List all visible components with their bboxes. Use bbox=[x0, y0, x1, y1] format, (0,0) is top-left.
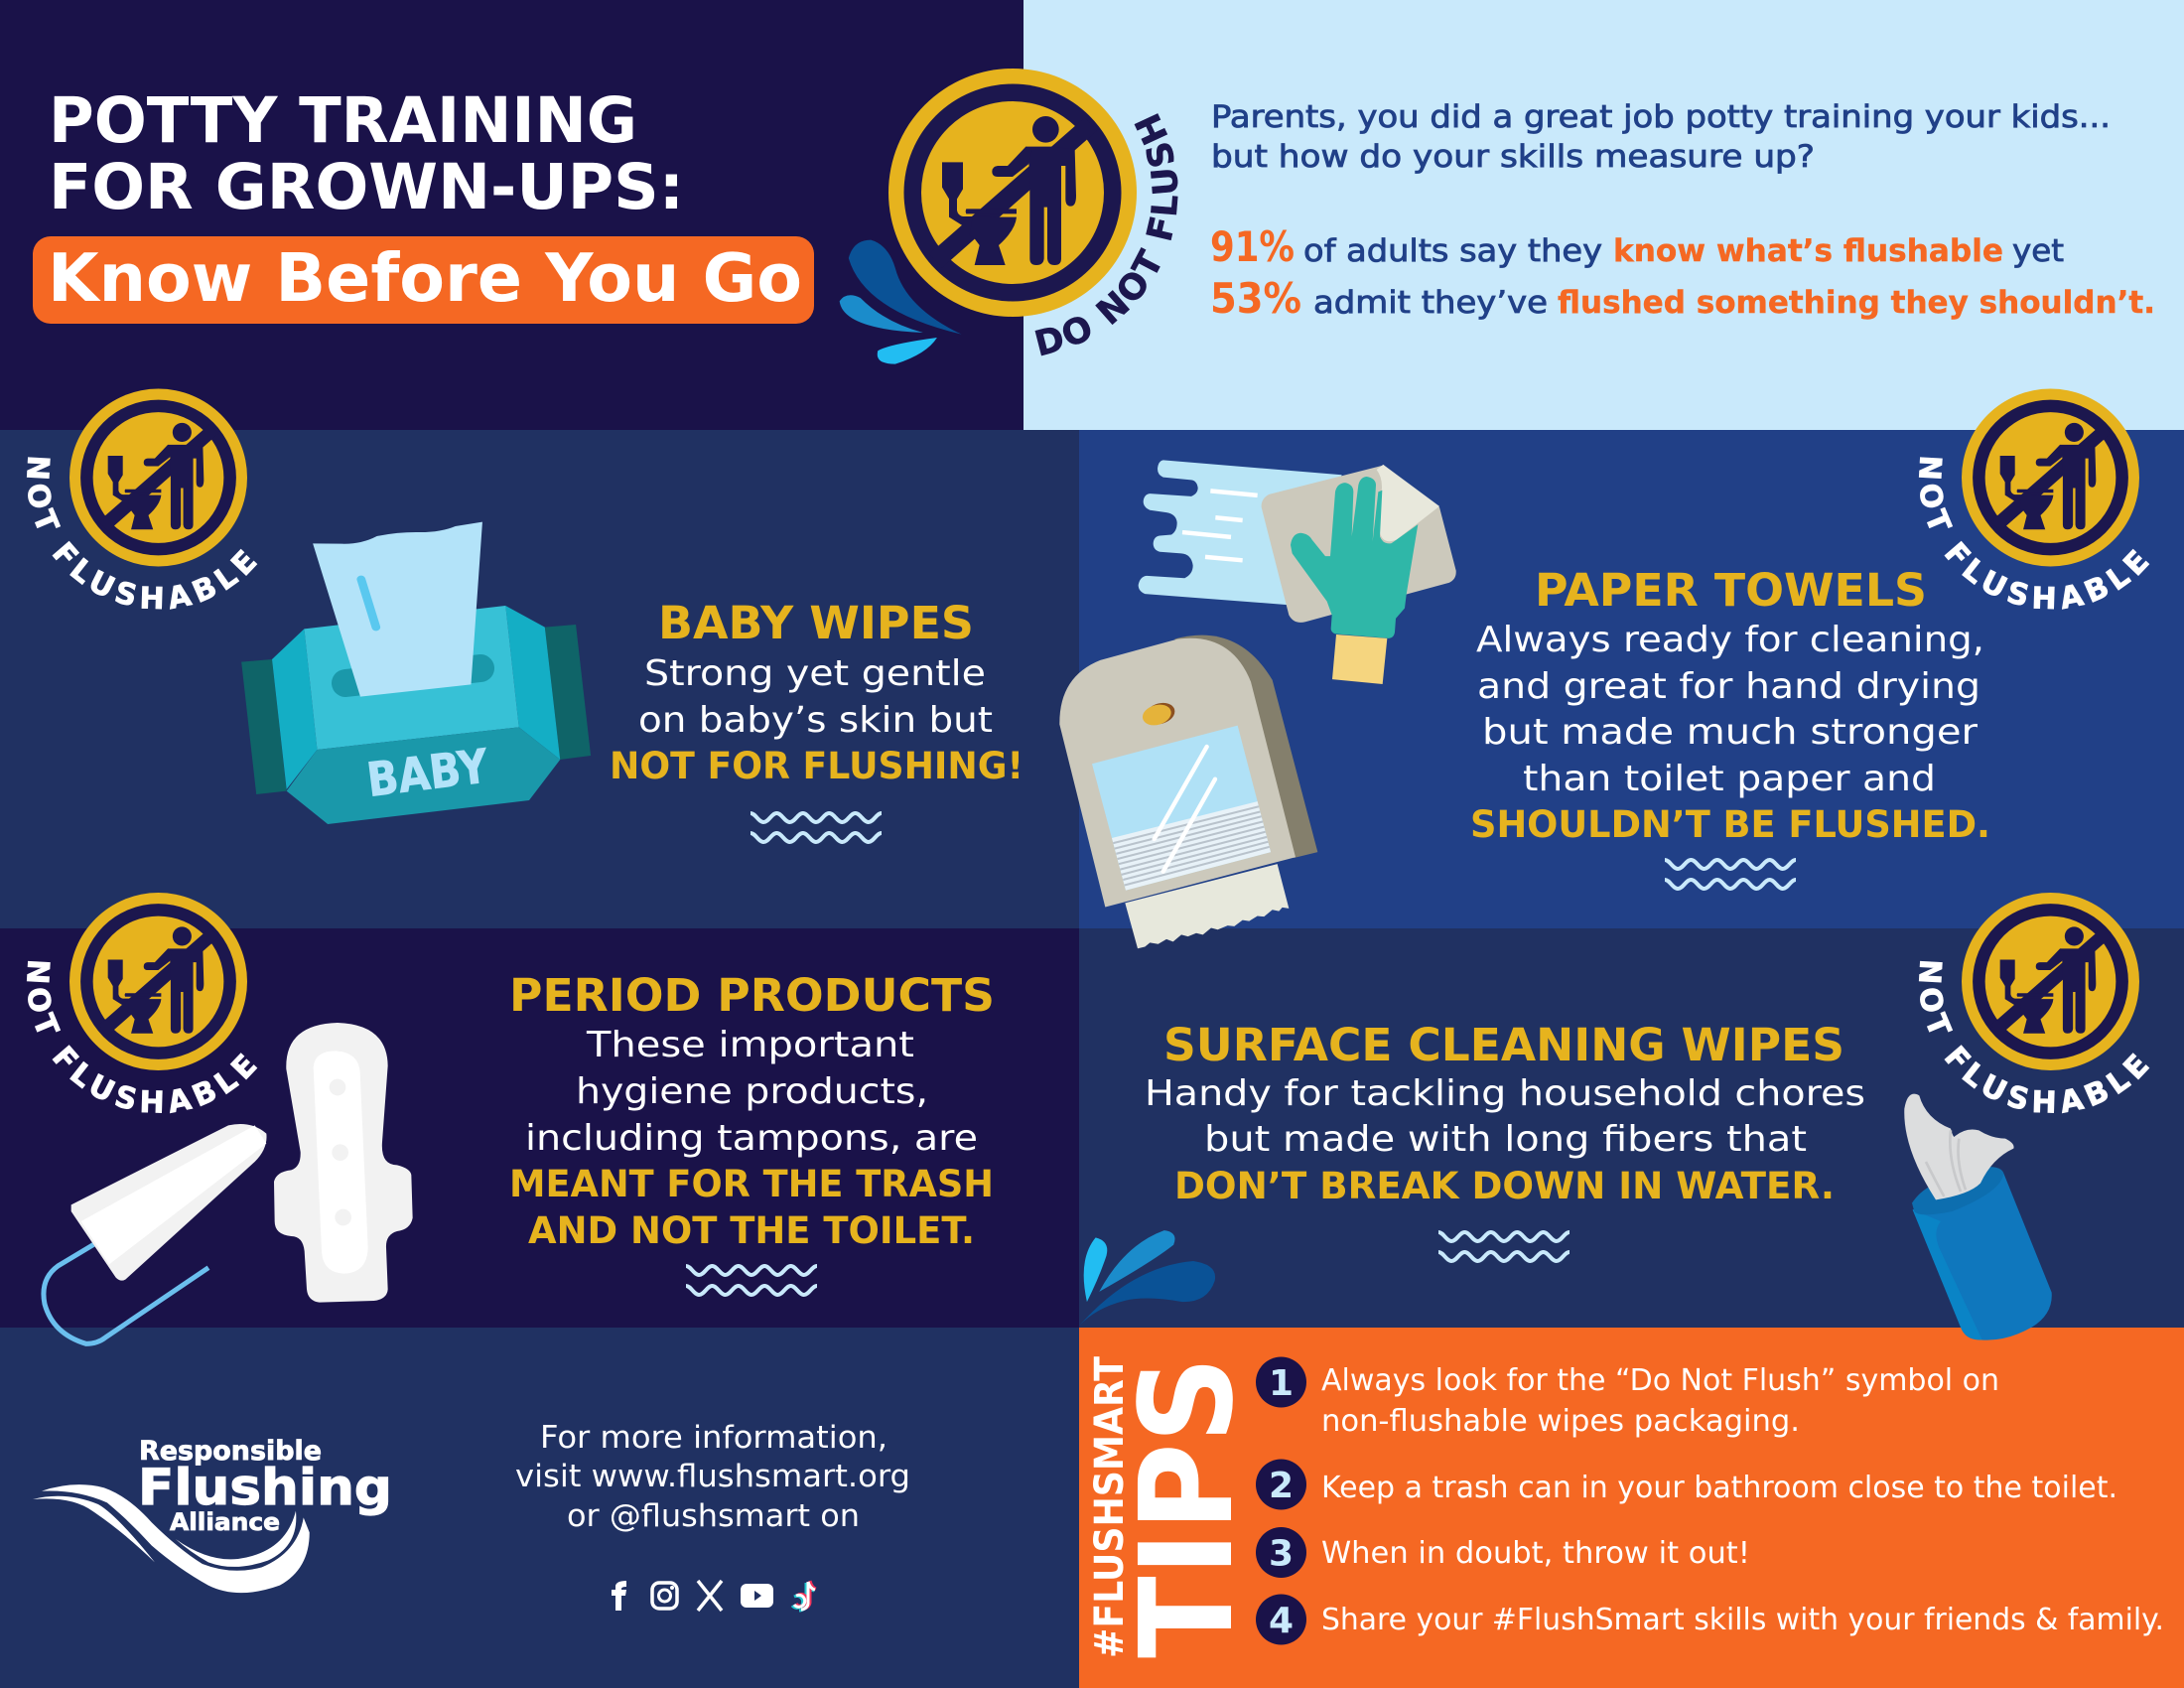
logo: Responsible Flushing Alliance: Flushing bbox=[138, 1459, 392, 1516]
text block: baby wipes description: Strong yet gentle bbox=[644, 653, 986, 694]
heading: baby wipes: BABY WIPES bbox=[658, 597, 974, 649]
intro question: Parents, you did a great job potty training your kids... bbox=[1211, 99, 2111, 135]
text block: more information bbox=[515, 1420, 910, 1534]
tip 3: 3 bbox=[1269, 1533, 1294, 1575]
icon: not flushable badge bbox=[1918, 389, 2150, 610]
statistic: 91 percent bbox=[1210, 222, 2064, 271]
text block: period products description: AND NOT THE TOILET. bbox=[528, 1209, 975, 1252]
text block: paper towels description: and great for hand drying bbox=[1477, 666, 1980, 707]
heading: surface cleaning wipes: SURFACE CLEANING WIPES bbox=[1163, 1019, 1844, 1071]
icon: squiggle bbox=[686, 1266, 817, 1295]
panel: header title bbox=[33, 84, 814, 324]
text block: period products description: MEANT FOR THE TRASH bbox=[509, 1163, 994, 1205]
tip 1: non-flushable wipes packaging. bbox=[1321, 1404, 1800, 1439]
text block: surface wipes description: but made with long fibers that bbox=[1204, 1119, 1807, 1160]
intro question bbox=[1211, 99, 2111, 175]
tip 1 bbox=[1256, 1356, 1999, 1439]
text block: period products description: These important bbox=[586, 1025, 914, 1065]
text block: paper towels description: but made much stronger bbox=[1482, 712, 1978, 753]
tip 4: Share your #FlushSmart skills with your friends & family. bbox=[1321, 1603, 2164, 1637]
text block: paper towels description bbox=[1470, 620, 1990, 846]
text block: period products description: including tampons, are bbox=[525, 1118, 978, 1159]
panel background: header left bbox=[0, 0, 1024, 430]
heading: period products: PERIOD PRODUCTS bbox=[509, 969, 995, 1022]
statistic: 53 percent: admit they’ve bbox=[1313, 285, 1548, 321]
tip 3 bbox=[1256, 1527, 1750, 1578]
tip 2: Keep a trash can in your bathroom close to the toilet. bbox=[1321, 1471, 2117, 1505]
text block: more information: For more information, bbox=[540, 1420, 887, 1456]
icon: squiggle bbox=[1438, 1232, 1570, 1261]
illustration: baby wipes box: BABY bbox=[364, 739, 491, 808]
logo: Responsible Flushing Alliance bbox=[33, 1436, 392, 1593]
tip 1: Always look for the “Do Not Flush” symbol on bbox=[1321, 1363, 1999, 1398]
text block: header statistics bbox=[1210, 99, 2155, 323]
title: FOR GROWN-UPS: bbox=[49, 151, 684, 223]
illustration: sanitary pad bbox=[274, 1023, 413, 1303]
text block: paper towels description: Always ready for cleaning, bbox=[1476, 620, 1984, 660]
logo: Responsible Flushing Alliance: Alliance bbox=[170, 1508, 280, 1536]
panel background: header right bbox=[1024, 0, 2184, 430]
panel: period products bbox=[26, 893, 995, 1346]
title: POTTY TRAINING bbox=[49, 84, 637, 157]
icon: not flushable badge: NOT FLUSHABLE bbox=[1918, 457, 2150, 610]
tip 1: 1 bbox=[1269, 1363, 1294, 1404]
icon: squiggle bbox=[1665, 860, 1796, 889]
icon: not flushable badge: NOT FLUSHABLE bbox=[1918, 961, 2150, 1114]
icon: not flushable badge bbox=[1918, 893, 2150, 1114]
text block: more information: or @flushsmart on bbox=[567, 1498, 860, 1534]
text block: paper towels description: SHOULDN’T BE FLUSHED. bbox=[1470, 803, 1990, 846]
text block: paper towels description: than toilet paper and bbox=[1523, 759, 1936, 799]
panel background: contact footer bbox=[0, 1328, 1079, 1688]
icon: do not flush badge: DO NOT FLUSH bbox=[1034, 113, 1178, 355]
illustration: wipes canister bbox=[1904, 1094, 2052, 1340]
text block: surface wipes description: DON’T BREAK DOWN IN WATER. bbox=[1174, 1165, 1835, 1207]
panel: baby wipes bbox=[26, 389, 1024, 844]
heading: paper towels: PAPER TOWELS bbox=[1535, 564, 1927, 617]
panel: contact footer bbox=[33, 1420, 910, 1611]
text block: baby wipes description: on baby’s skin but bbox=[638, 700, 993, 741]
icon: not flushable badge: NOT FLUSHABLE bbox=[26, 961, 258, 1114]
icon: water splash top bbox=[840, 240, 961, 364]
icon: squiggle bbox=[751, 813, 882, 842]
statistic: 53 percent: 53% bbox=[1210, 274, 1301, 323]
statistic: 91 percent: 91% bbox=[1210, 222, 1295, 271]
statistic: 91 percent: yet bbox=[2012, 233, 2064, 269]
title bbox=[49, 84, 684, 223]
illustration: tampon bbox=[44, 1124, 267, 1343]
text block: surface wipes description: Handy for tackling household chores bbox=[1145, 1073, 1865, 1114]
text block: baby wipes description bbox=[610, 653, 1024, 787]
illustration: hand wiping with paper towel bbox=[1139, 460, 1456, 684]
icon: not flushable badge bbox=[26, 389, 258, 610]
statistic: 91 percent: know what’s flushable bbox=[1613, 233, 2003, 269]
text block: baby wipes description: NOT FOR FLUSHING! bbox=[610, 745, 1024, 787]
heading: #FlushSmart tips: #FLUSHSMART bbox=[1087, 1355, 1133, 1658]
illustration: paper towel dispenser bbox=[1059, 635, 1317, 948]
panel background: tips bbox=[1079, 1328, 2184, 1688]
icon: water splash bbox=[1079, 1230, 1215, 1326]
panel: paper towels bbox=[1059, 389, 2150, 949]
panel background: period products bbox=[0, 928, 1079, 1328]
statistic: 53 percent bbox=[1210, 274, 2155, 323]
tip 4: 4 bbox=[1269, 1601, 1294, 1641]
statistic: 53 percent: flushed something they shouldn’t. bbox=[1558, 285, 2155, 321]
icon: not flushable badge: NOT FLUSHABLE bbox=[26, 457, 258, 610]
text block: period products description: hygiene products, bbox=[576, 1071, 928, 1112]
text block: surface wipes description bbox=[1145, 1073, 1865, 1207]
text block: more information: visit www.flushsmart.org bbox=[515, 1459, 910, 1494]
subtitle pill: Know Before You Go bbox=[48, 239, 802, 317]
icon: not flushable badge bbox=[26, 893, 258, 1114]
panel background: paper towels bbox=[1079, 430, 2184, 928]
panel: tips bbox=[1087, 1355, 2164, 1658]
panel: surface cleaning wipes bbox=[1080, 893, 2150, 1340]
intro question: but how do your skills measure up? bbox=[1211, 139, 1815, 175]
tip 2: 2 bbox=[1269, 1466, 1294, 1506]
text block: period products description bbox=[509, 1025, 994, 1252]
illustration: baby wipes box bbox=[241, 522, 591, 824]
icons: social media bbox=[612, 1581, 816, 1611]
tip 4 bbox=[1256, 1595, 2164, 1644]
logo: Responsible Flushing Alliance: Responsible bbox=[139, 1436, 322, 1467]
panel background: baby wipes bbox=[0, 430, 1079, 928]
tip 3: When in doubt, throw it out! bbox=[1321, 1536, 1750, 1571]
statistic: 91 percent: of adults say they bbox=[1303, 233, 1602, 269]
panel background: surface cleaning wipes bbox=[1079, 928, 2184, 1328]
tip 2 bbox=[1256, 1460, 2117, 1509]
heading: #FlushSmart tips: TIPS bbox=[1113, 1356, 1262, 1658]
icon: do not flush badge bbox=[888, 69, 1178, 355]
